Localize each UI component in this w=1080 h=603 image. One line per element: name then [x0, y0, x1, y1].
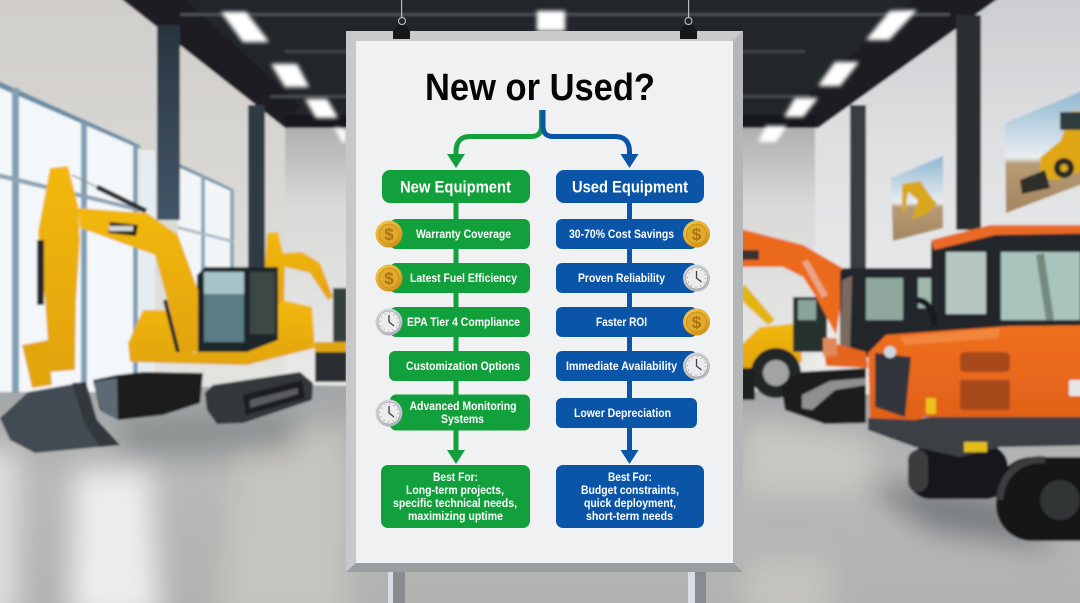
best for: used equipment	[556, 465, 704, 528]
item: epa tier 4 compliance	[376, 307, 530, 337]
bucket	[0, 382, 120, 453]
icon: coin	[683, 220, 710, 248]
icon: coin: $	[692, 313, 702, 332]
item: latest fuel efficiency	[376, 263, 530, 293]
front machine bumper	[868, 417, 1080, 457]
yellow excavators	[0, 166, 347, 453]
item: advanced monitoring systems: Advanced Monitoring	[410, 399, 516, 413]
back excavator	[265, 232, 347, 382]
front machine tracks	[908, 445, 1008, 499]
blue connector line and arrow	[620, 200, 638, 464]
icon: clock	[376, 400, 402, 426]
heading: used equipment: Used Equipment	[572, 178, 688, 196]
icon: coin: $	[384, 225, 394, 244]
item: immediate availability: Immediate Availability	[566, 359, 677, 373]
wall posters	[891, 90, 1080, 241]
front machine body	[868, 325, 1080, 432]
icon: coin	[376, 264, 402, 292]
poster board	[346, 0, 743, 572]
front machine cab	[931, 226, 1080, 335]
item: cost savings: 30-70% Cost Savings	[569, 227, 674, 241]
orange and yellow machines	[741, 225, 1080, 541]
column: new equipment	[376, 170, 530, 528]
item: warranty coverage: Warranty Coverage	[416, 227, 511, 241]
icon: coin: $	[692, 225, 702, 244]
best for: used equipment: short-term needs	[586, 509, 673, 523]
heading: new equipment	[382, 170, 530, 203]
yellow machine behind	[741, 285, 827, 400]
orange excavator boom	[741, 229, 846, 335]
split arrow: new equipment	[447, 110, 542, 168]
item: faster roi	[556, 307, 710, 337]
item: lower depreciation	[556, 398, 697, 428]
heading: new equipment: New Equipment	[400, 178, 511, 196]
icon: clock	[683, 352, 710, 380]
far track	[93, 372, 203, 420]
hanging clips	[393, 0, 697, 39]
poster frame	[346, 31, 743, 572]
icon: clock	[683, 264, 710, 292]
heading: used equipment	[556, 170, 704, 203]
best for: new equipment: Best For:	[433, 470, 478, 484]
arm	[38, 166, 80, 372]
item: customization options	[389, 351, 530, 381]
column: used equipment	[556, 170, 710, 528]
cab	[197, 267, 278, 352]
best for: used equipment: Best For:	[608, 470, 652, 484]
best for: new equipment: specific technical needs,	[393, 496, 517, 510]
windows and columns	[0, 15, 981, 393]
best for: new equipment: maximizing uptime	[408, 509, 503, 523]
stand legs	[388, 570, 706, 603]
item: faster roi: Faster ROI	[596, 315, 647, 329]
icon: coin	[683, 308, 710, 336]
best for: used equipment: Budget constraints,	[581, 483, 679, 497]
item: latest fuel efficiency: Latest Fuel Efficiency	[410, 271, 517, 285]
item: advanced monitoring systems: Systems	[441, 412, 484, 426]
split arrow: used equipment	[543, 110, 638, 168]
item: proven reliability	[556, 263, 710, 293]
green connector line and arrow	[447, 200, 465, 464]
item: lower depreciation: Lower Depreciation	[574, 406, 671, 420]
icon: coin	[376, 220, 402, 248]
title: New or Used?	[425, 67, 655, 109]
item: advanced monitoring systems	[376, 394, 530, 430]
floor reflections	[0, 410, 1060, 603]
near track	[205, 372, 313, 424]
icon: coin: $	[384, 269, 394, 288]
orange excavator tracks	[781, 368, 866, 424]
icon: clock	[376, 308, 402, 336]
ceiling lights	[221, 10, 917, 143]
best for: used equipment: quick deployment,	[584, 496, 676, 510]
body	[128, 300, 315, 365]
item: immediate availability	[556, 351, 710, 381]
item: epa tier 4 compliance: EPA Tier 4 Compliance	[407, 315, 520, 329]
orange excavator cab	[840, 268, 935, 357]
best for: new equipment	[381, 465, 530, 528]
boom	[78, 208, 198, 352]
item: warranty coverage	[376, 219, 530, 249]
item: proven reliability: Proven Reliability	[578, 271, 665, 285]
item: customization options: Customization Options	[406, 359, 520, 373]
best for: new equipment: Long-term projects,	[406, 483, 504, 497]
item: cost savings	[556, 219, 710, 249]
